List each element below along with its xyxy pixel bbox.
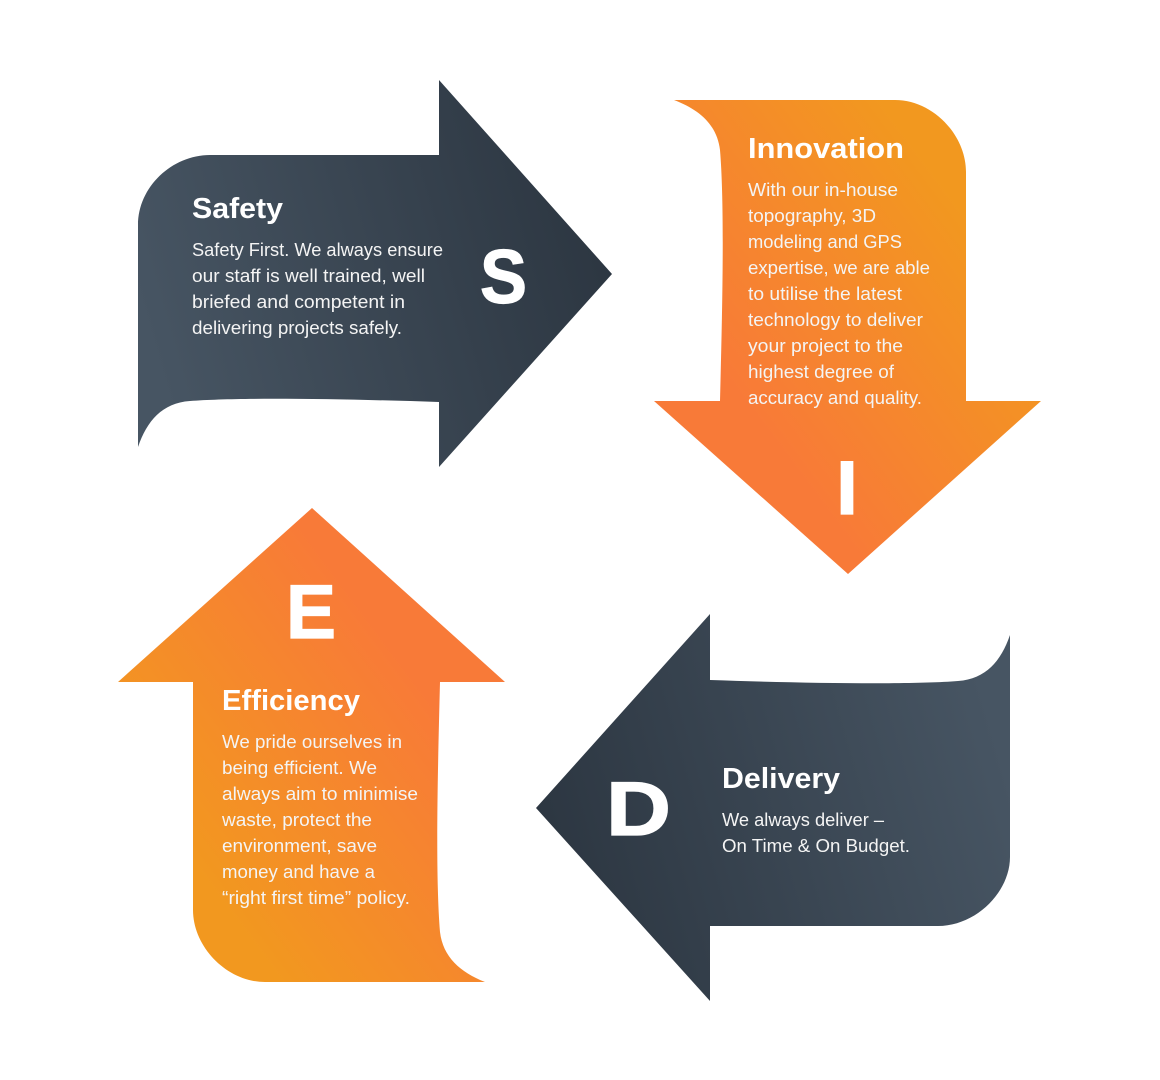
text block: Safety description: briefed and competent in bbox=[192, 292, 405, 312]
heading: Safety: Safety bbox=[192, 193, 283, 225]
text block: Efficiency description bbox=[221, 732, 418, 908]
panel: Delivery arrow bbox=[536, 614, 1010, 1001]
text block: Innovation description bbox=[748, 180, 930, 408]
text block: Innovation description: expertise, we are able bbox=[748, 258, 930, 278]
letter: D: D bbox=[606, 767, 671, 852]
text block: Delivery description bbox=[722, 810, 910, 856]
panel: Innovation arrow bbox=[654, 100, 1041, 574]
letter: E: E bbox=[286, 570, 336, 655]
panel: Efficiency arrow bbox=[118, 508, 505, 982]
text block: Efficiency description: money and have a bbox=[222, 862, 376, 882]
panel: Safety arrow bbox=[138, 80, 612, 467]
letter: I: I bbox=[836, 446, 858, 531]
letter: S: S bbox=[480, 235, 527, 320]
heading: Innovation: Innovation bbox=[748, 133, 904, 165]
arrow shape: Innovation bbox=[654, 100, 1041, 574]
text block: Innovation description: topography, 3D bbox=[748, 206, 876, 226]
arrow shape: Delivery bbox=[536, 614, 1010, 1001]
text block: Innovation description: modeling and GPS bbox=[748, 232, 902, 252]
text block: Efficiency description: We pride ourselves in bbox=[222, 732, 402, 752]
heading: Efficiency: Efficiency bbox=[222, 685, 360, 717]
text block: Innovation description: highest degree of bbox=[748, 362, 895, 382]
arrow shape: Safety bbox=[138, 80, 612, 467]
text block: Efficiency description: environment, save bbox=[222, 836, 377, 856]
text block: Innovation description: technology to deliver bbox=[748, 310, 923, 330]
text block: Safety description: Safety First. We always ensure bbox=[192, 240, 443, 260]
arrow shape: Efficiency bbox=[118, 508, 505, 982]
heading: Delivery: Delivery bbox=[722, 763, 840, 795]
text block: Efficiency description: always aim to minimise bbox=[222, 784, 418, 804]
text block: Efficiency description: being efficient. We bbox=[222, 758, 377, 778]
text block: Safety description bbox=[192, 240, 443, 338]
text block: Delivery description: On Time & On Budget. bbox=[722, 836, 910, 856]
text block: Safety description: our staff is well trained, well bbox=[192, 266, 425, 286]
text block: Innovation description: accuracy and quality. bbox=[748, 388, 922, 408]
text block: Efficiency description: “right first time” policy. bbox=[222, 888, 410, 908]
text block: Safety description: delivering projects safely. bbox=[192, 318, 402, 338]
text block: Delivery description: We always deliver – bbox=[722, 810, 884, 830]
text block: Efficiency description: waste, protect the bbox=[221, 810, 372, 830]
text block: Innovation description: your project to the bbox=[748, 336, 903, 356]
text block: Innovation description: With our in-house bbox=[748, 180, 898, 200]
text block: Innovation description: to utilise the latest bbox=[748, 284, 902, 304]
